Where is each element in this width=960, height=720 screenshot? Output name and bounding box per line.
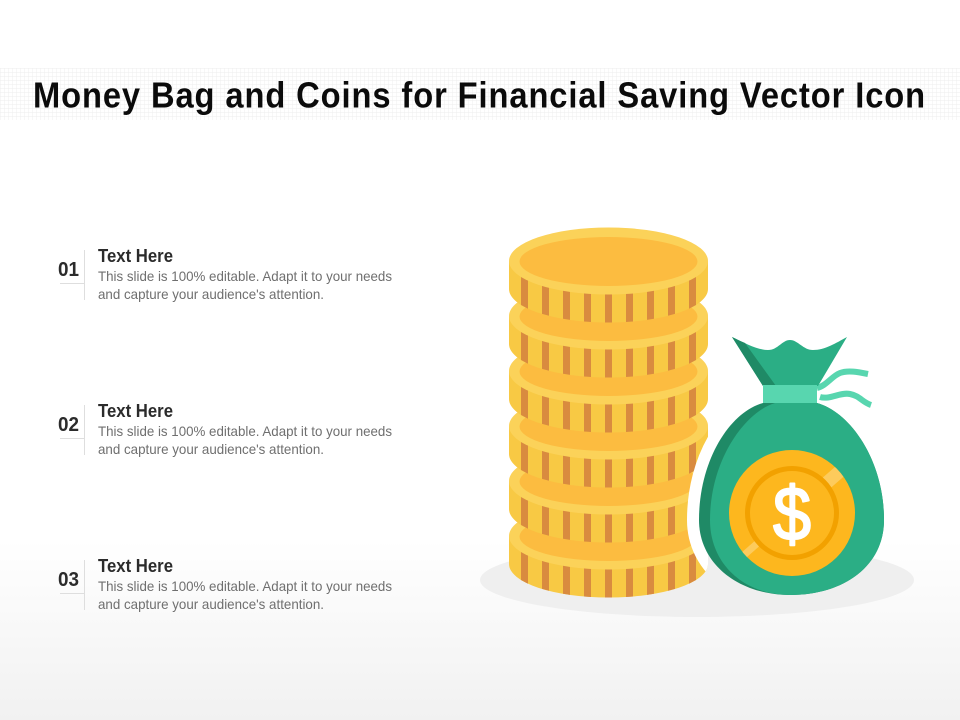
ground shadow — [480, 543, 914, 617]
item 03 — [58, 556, 392, 612]
item 01 body: and capture your audience's attention. — [98, 286, 324, 302]
coin stack — [509, 228, 708, 598]
coin ring — [748, 468, 836, 558]
bag body — [710, 403, 884, 595]
item 02 — [58, 401, 392, 457]
item 03 body: This slide is 100% editable. Adapt it to your needs — [98, 578, 392, 594]
dollar sign: $ — [773, 472, 811, 557]
item 01 body — [98, 268, 392, 302]
ribbon ends — [817, 371, 871, 405]
bag body dark edge — [699, 403, 884, 595]
item 02 body: and capture your audience's attention. — [98, 441, 324, 457]
item 01 body: This slide is 100% editable. Adapt it to your needs — [98, 268, 392, 284]
item 02 heading: Text Here — [98, 401, 173, 421]
neck shadow — [732, 337, 776, 386]
item 02 body: This slide is 100% editable. Adapt it to your needs — [98, 423, 392, 439]
item 03 heading: Text Here — [98, 556, 173, 576]
item 02 body — [98, 423, 392, 457]
dollar coin — [729, 450, 855, 576]
item 01 — [58, 246, 392, 302]
tie band — [763, 385, 817, 403]
white halo cut into coins — [687, 436, 708, 572]
lower background gradient — [0, 540, 960, 720]
coin highlights — [742, 467, 844, 557]
item 03 body — [98, 578, 392, 612]
bag neck — [732, 337, 847, 386]
number 02: 02 — [58, 414, 79, 436]
number 03: 03 — [58, 569, 79, 591]
title band — [0, 68, 960, 120]
item 03 body: and capture your audience's attention. — [98, 596, 324, 612]
number 01: 01 — [58, 259, 79, 281]
money bag — [699, 337, 884, 595]
item 01 heading: Text Here — [98, 246, 173, 266]
